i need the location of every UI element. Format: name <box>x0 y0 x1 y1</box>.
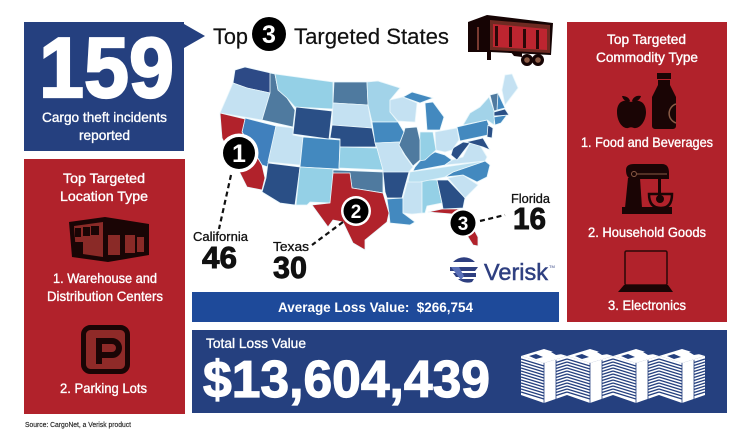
panel: 159 incidents <box>24 21 205 151</box>
location heading: Location Type <box>60 188 148 204</box>
average loss bar <box>192 292 559 322</box>
Verisk logo: TM <box>549 264 555 269</box>
callout: Texas <box>273 196 371 285</box>
electronics label: 3. Electronics <box>608 297 686 313</box>
household label: 2. Household Goods <box>588 224 706 240</box>
title: Targeted States <box>294 24 449 49</box>
callout: California: California <box>193 229 249 244</box>
callout: Texas: 30 <box>273 250 307 285</box>
big number 159: 159 <box>39 21 174 116</box>
title <box>213 17 449 51</box>
source note: Source: CargoNet, a Verisk product <box>25 422 131 429</box>
Verisk logo: Verisk <box>484 259 549 285</box>
incidents caption: reported <box>79 127 130 143</box>
state: California <box>220 113 265 190</box>
icon: parking sign <box>84 328 128 372</box>
location heading: Top Targeted <box>63 170 145 186</box>
US map <box>220 67 518 250</box>
warehouse label: 1. Warehouse and <box>53 270 157 286</box>
parking label: 2. Parking Lots <box>60 380 147 396</box>
callout: Florida: Florida <box>511 191 551 206</box>
icon: stand mixer <box>622 164 672 214</box>
incidents caption: Cargo theft incidents <box>42 109 167 125</box>
callout: California: 46 <box>202 240 237 275</box>
callout: California <box>193 134 258 275</box>
total loss amount: $13,604,439 <box>203 351 490 409</box>
location heading <box>60 170 148 204</box>
state: Florida <box>428 209 478 246</box>
Verisk logo <box>450 257 555 285</box>
food label: 1. Food and Beverages <box>581 134 713 150</box>
incidents caption <box>42 109 167 143</box>
callout: Florida: 16 <box>513 201 546 236</box>
panel: commodity type <box>567 22 727 322</box>
commodity heading: Commodity Type <box>596 49 698 65</box>
warehouse label: Distribution Centers <box>47 288 163 304</box>
callout: Florida <box>448 191 551 238</box>
warehouse label <box>47 270 163 304</box>
average loss bar: Average Loss Value: $266,754 <box>278 299 473 315</box>
title number badge: 3 <box>262 21 276 49</box>
title: Top <box>213 24 248 49</box>
icon: laptop <box>618 251 673 292</box>
title number badge <box>252 17 286 51</box>
icon: warehouse <box>69 217 149 262</box>
callout: Texas: 2 <box>351 202 361 223</box>
states shaded by incident count <box>220 67 518 225</box>
state: Texas <box>312 173 389 250</box>
commodity heading <box>596 31 698 65</box>
panel: location type <box>24 159 185 414</box>
panel: total loss value <box>192 330 727 413</box>
icon: stacks of cash <box>521 349 705 403</box>
callout: California: 1 <box>232 140 246 168</box>
callout: Texas: Texas <box>273 239 310 254</box>
callout: Florida: 3 <box>458 214 468 235</box>
icon: apple and bottle <box>617 73 676 129</box>
icon: cargo trailer <box>468 15 553 66</box>
total loss heading: Total Loss Value <box>206 335 306 351</box>
commodity heading: Top Targeted <box>607 31 686 47</box>
